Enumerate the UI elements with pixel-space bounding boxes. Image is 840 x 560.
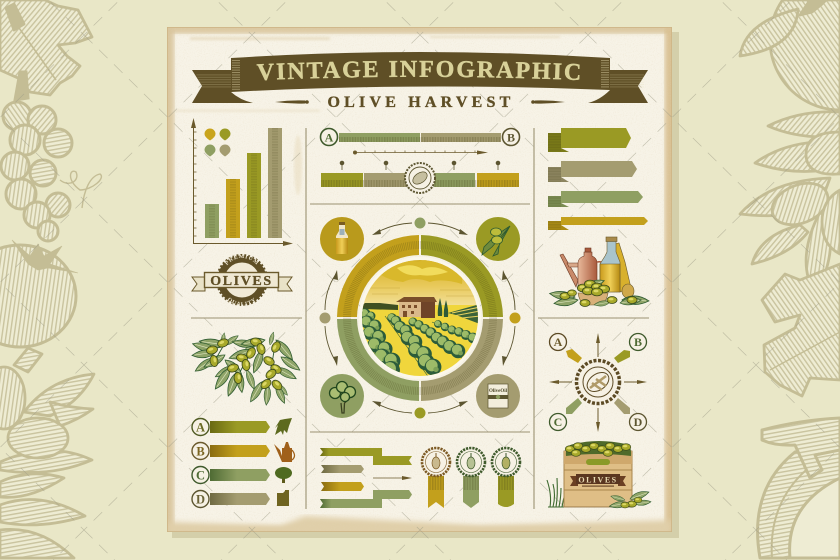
crate side branch (609, 489, 651, 509)
bowl (578, 293, 608, 305)
ribbon: olive stepped (320, 448, 412, 465)
rosette: olive (492, 448, 520, 507)
engraving: grape leaf, right (762, 264, 840, 396)
paper sheet (165, 24, 673, 534)
subtitle (275, 94, 565, 111)
ribbon: gold (321, 482, 364, 491)
ribbon: green stepped (320, 490, 412, 508)
label B: B (507, 130, 515, 144)
segment bars (321, 173, 519, 187)
ring segment: tan (421, 319, 503, 401)
crate olives (565, 441, 631, 456)
badge: premium olives quality: QUALITY (228, 298, 256, 306)
gear with olive (576, 360, 620, 404)
bar: tan (268, 128, 282, 238)
divider lines (191, 128, 649, 509)
ribbon: gold (548, 217, 648, 230)
axis ticks (194, 132, 196, 236)
rosette ribbons (422, 448, 520, 508)
farmhouse (396, 297, 437, 318)
engraving: large fruit, bottom right (758, 418, 840, 558)
progress bar A to B (339, 133, 501, 142)
bar: olive (247, 153, 261, 238)
badge: premium olives quality: OLIVES (210, 274, 273, 289)
engraving: tomato (0, 240, 78, 347)
top timeline (320, 128, 520, 193)
icon: crate (277, 490, 289, 506)
tree rows (359, 308, 478, 379)
ribbon: tan (548, 161, 637, 182)
icon circle: oil bottle (320, 217, 364, 261)
subtitle: OLIVE HARVEST (328, 94, 514, 111)
timeline pins (340, 161, 500, 170)
slim bottle (614, 243, 634, 298)
bar: gold (226, 179, 240, 238)
arrow diagram A B C D (549, 333, 647, 432)
ribbon: green (548, 191, 643, 207)
clouds (370, 260, 474, 296)
bar chart (191, 118, 293, 246)
icon: oil can (274, 442, 294, 462)
hill stripes (448, 305, 478, 324)
icon circle: olive oil tin (476, 374, 520, 418)
hedge (360, 303, 398, 310)
icon: olive sprig (275, 418, 292, 435)
y axis arrow (191, 118, 196, 128)
icon circle: olive sprig (476, 217, 520, 261)
icon circle: olive oil tin: OliveOil (489, 389, 508, 394)
ribbon: tan (321, 465, 364, 473)
label A: A (325, 130, 334, 144)
x axis arrow (283, 241, 293, 246)
label A: A (554, 335, 563, 349)
pointer: gold (566, 349, 582, 363)
illustration: oil can, bottles and olive bowl (549, 237, 649, 307)
pointer: green (566, 398, 582, 414)
ring segment: olive (421, 235, 503, 317)
icon: tree (275, 467, 292, 483)
list row B: B (196, 444, 205, 458)
label B: B (634, 335, 642, 349)
legend pins (204, 129, 230, 156)
grass (547, 478, 565, 507)
gear with olive (405, 163, 435, 193)
arrow (373, 476, 412, 480)
badge: premium olives quality (191, 254, 293, 306)
label B (502, 128, 520, 146)
cycle arrows (325, 223, 515, 413)
list row A: A (196, 420, 205, 434)
rosette: gold (422, 448, 450, 508)
bar: green (205, 204, 219, 238)
pointer: olive (614, 350, 630, 363)
cycle dots (320, 218, 520, 418)
small ribbons: bottom middle (320, 448, 412, 508)
cypress trees (438, 298, 448, 317)
list row C: C (196, 468, 205, 482)
ribbon: olive (548, 128, 631, 152)
timeline arrow (353, 150, 488, 154)
arrows (549, 333, 647, 432)
olives in bowl (577, 277, 610, 296)
engraving: olives and leaves, bottom left (0, 348, 94, 558)
label C: C (554, 415, 562, 429)
engraving: fruit and leaf, top right (740, 0, 840, 110)
chart axes (194, 122, 286, 244)
field (360, 305, 480, 380)
engraving: grape bunch (1, 72, 101, 241)
crate body (564, 451, 632, 507)
pointer: tan (614, 398, 630, 414)
olive crate (547, 441, 651, 509)
crate label: OLIVES (578, 476, 618, 484)
ring segment: gold (337, 235, 419, 317)
label A (320, 128, 338, 146)
oil bottle (600, 237, 620, 292)
icon circle: olive tree (320, 374, 364, 418)
list row D: D (196, 492, 205, 506)
label D: D (634, 415, 643, 429)
paper shadow (172, 32, 679, 538)
field rows (362, 312, 474, 376)
title text: VINTAGE INFOGRAPHIC (256, 60, 580, 80)
ring segment: green (337, 319, 419, 401)
rosette: green (457, 448, 485, 508)
title ribbon (192, 52, 648, 103)
side leaves and olives (549, 290, 649, 307)
engraving: olives and leaves, right (740, 112, 840, 294)
olive branch (191, 331, 302, 405)
farm landscape (362, 260, 478, 376)
badge: premium olives quality: PREMIUM (224, 254, 259, 266)
bookmark ribbons, top right (548, 128, 648, 230)
list: A to D with icons (192, 418, 294, 508)
engraving: grape leaf, top left (0, 0, 92, 95)
central ring chart (337, 235, 503, 401)
copper can (560, 248, 604, 290)
